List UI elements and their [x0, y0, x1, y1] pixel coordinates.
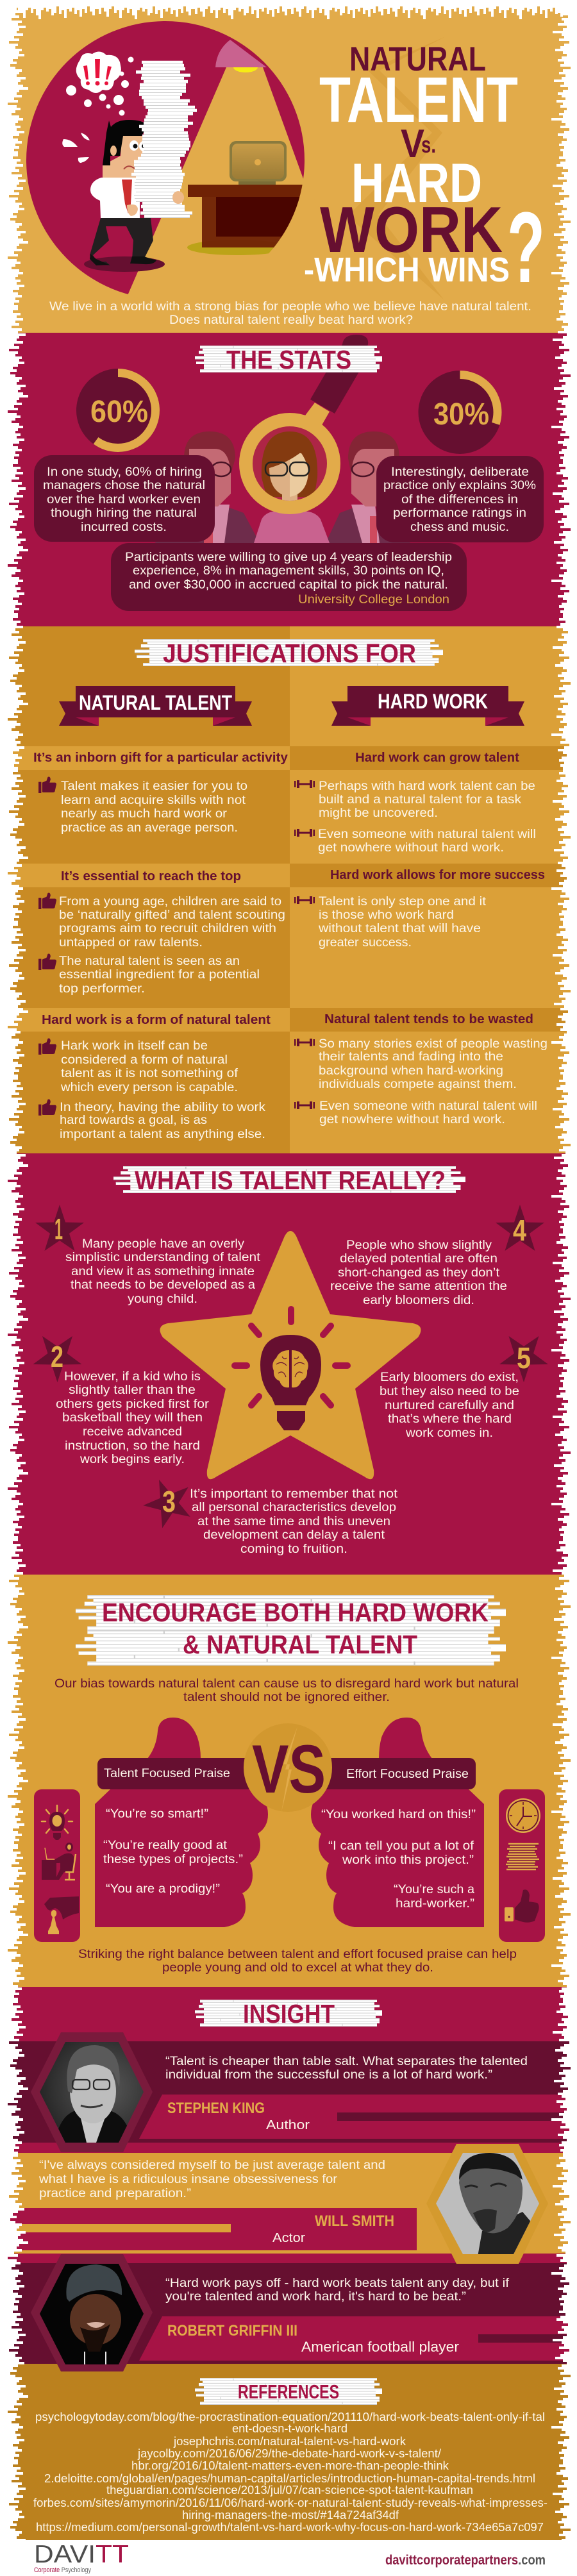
candidate centre — [254, 511, 330, 543]
quote: robert griffin iii: ROBERT GRIFFIN III — [167, 2322, 297, 2339]
bulb — [260, 1335, 321, 1430]
row 1 natural talent: Talent makes it easier for you to — [61, 779, 247, 793]
point 3: It’s important to remember that not — [190, 1487, 398, 1501]
thumb: talent focused praise: “You’re so smart!” — [106, 1807, 208, 1821]
icon panel: effort — [499, 1789, 545, 1942]
point 5: nurtured carefully and — [385, 1398, 514, 1412]
heading — [76, 1595, 506, 1666]
quote: robert griffin iii — [31, 2254, 510, 2371]
row 2 natural talent: It’s essential to reach the top — [61, 869, 241, 883]
point 2: However, if a kid who is — [64, 1369, 201, 1384]
point 4: receive the same attention the — [330, 1279, 507, 1293]
title: TALENT — [319, 64, 518, 136]
panel: header illustration — [26, 21, 305, 294]
callout: 30 percent — [376, 456, 544, 542]
panel: the stats — [34, 335, 544, 611]
title: -WHICH WINS — [304, 251, 510, 289]
point 4: People who show slightly — [346, 1238, 492, 1252]
row 2 natural talent: From a young age, children are said to — [59, 894, 281, 908]
row 2 natural talent: untapped or raw talents. — [59, 935, 203, 949]
thumb: talent focused praise — [95, 1718, 268, 1927]
point 5: work comes in. — [405, 1426, 493, 1440]
closing text: people young and old to excel at what they do. — [162, 1961, 433, 1975]
point 2: 2 — [51, 1340, 63, 1373]
intro text: Does natural talent really beat hard work? — [169, 313, 413, 327]
quote: will smith: practice and preparation.” — [39, 2186, 191, 2200]
thumb: effort focused praise: “You worked hard on this!” — [321, 1807, 476, 1821]
callout: 60 percent: over the hard worker even — [47, 492, 201, 506]
row 2 hard work: is those who work hard — [319, 908, 454, 922]
point 5 — [380, 1336, 548, 1440]
row 3 hard work: get nowhere without hard work. — [319, 1112, 505, 1126]
row 3 hard work: individuals compete against them. — [319, 1077, 517, 1091]
footer: website: davittcorporatepartners.com — [385, 2553, 546, 2568]
central star with light bulb — [160, 1231, 421, 1479]
row 2 hard work: Talent is only step one and it — [319, 894, 487, 908]
quote: will smith: Actor — [272, 2231, 305, 2245]
point 1: simplistic understanding of talent — [65, 1250, 261, 1264]
thumb: effort focused praise: Effort Focused Praise — [346, 1767, 469, 1781]
background lightning bolt — [347, 37, 446, 299]
closing text: Striking the right balance between talent and effort focused praise can help — [78, 1947, 517, 1961]
quote: robert griffin iii: American football player — [301, 2339, 459, 2355]
callout: participants: experience, 8% in management skills, 30 points on IQ, — [133, 564, 444, 578]
quote: robert griffin iii: “Hard work pays off - hard work beats talent any day, but if — [165, 2276, 510, 2290]
callout: 60 percent: though hiring the natural — [51, 506, 197, 520]
callout: 30 percent: chess and music. — [410, 520, 509, 534]
vs badge: VS — [252, 1730, 326, 1807]
heading: & NATURAL TALENT — [183, 1630, 417, 1659]
ribbon: natural talent: NATURAL TALENT — [79, 691, 232, 714]
icon: person at desk — [42, 1843, 76, 1880]
heading: REFERENCES — [238, 2380, 339, 2403]
callout: 30 percent: practice only explains 30% — [383, 478, 536, 492]
quote: stephen king: individual from the successful one is a lot of hard work.” — [165, 2068, 492, 2082]
point 2 — [33, 1336, 210, 1466]
icon: stack of papers — [506, 1844, 539, 1869]
quote: stephen king: Author — [266, 2118, 310, 2132]
heading: THE STATS — [226, 345, 351, 374]
thumb: talent focused praise: “You are a prodigy!” — [106, 1882, 220, 1896]
row 3 natural talent — [38, 1013, 271, 1141]
portrait placeholder: stephen king — [38, 2042, 147, 2145]
callout: participants — [111, 543, 467, 611]
quote: stephen king: “Talent is cheaper than table salt. What separates the talented — [165, 2054, 528, 2068]
row 3 natural talent: which every person is capable. — [60, 1080, 238, 1094]
icon: hand and chess piece — [44, 1896, 79, 1934]
portrait placeholder: will smith — [433, 2151, 542, 2257]
row 3 natural talent: considered a form of natural — [61, 1053, 228, 1067]
point 1: that needs to be developed as a — [71, 1278, 255, 1292]
point 3 — [137, 1471, 398, 1556]
stat dial: 30% — [418, 371, 501, 454]
title: NATURAL — [349, 40, 486, 78]
intro text — [54, 1677, 519, 1704]
callout: 60 percent: incurred costs. — [81, 520, 167, 534]
point 2: receive advanced — [83, 1425, 182, 1439]
stat dial: 60%: 60% — [90, 395, 148, 429]
panel: insight — [31, 1999, 548, 2371]
row 2 natural talent: top performer. — [59, 982, 145, 996]
point 4: early bloomers did. — [363, 1293, 474, 1307]
quote: stephen king: STEPHEN KING — [167, 2100, 265, 2117]
reference list: theguardian.com/science/2013/jul/07/can-science-spot-talent-kaufman — [106, 2483, 473, 2497]
reference list: 2.deloitte.com/global/en/pages/human-capital/articles/introduction-human-capital-trends.html — [44, 2471, 535, 2485]
row 1 natural talent: learn and acquire skills with not — [61, 793, 246, 807]
stressed office worker — [84, 120, 165, 272]
thought bubble — [62, 51, 133, 163]
callout: 30 percent: of the differences in — [401, 492, 518, 506]
icon: clock — [506, 1798, 540, 1833]
row 1 hard work: might be uncovered. — [319, 806, 438, 820]
reference list: forbes.com/sites/amymorin/2016/11/06/hard-work-or-natural-talent-study-reveals-what-impresses- — [33, 2496, 548, 2509]
row 1 natural talent — [33, 751, 288, 835]
light rays — [235, 1309, 347, 1405]
callout: participants: Participants were willing to give up 4 years of leadership — [125, 550, 452, 564]
intro text — [49, 299, 531, 327]
row 2 natural talent — [38, 869, 285, 996]
thumb: effort focused praise: hard-worker.” — [396, 1896, 474, 1911]
row 3 natural talent: Hark work in itself can be — [61, 1039, 208, 1053]
point 4 — [330, 1205, 544, 1307]
thumb: effort focused praise — [311, 1718, 484, 1927]
row 3 hard work: Even someone with natural talent will — [319, 1099, 537, 1113]
row 2 natural talent: essential ingredient for a potential — [59, 967, 260, 982]
row 2 natural talent: The natural talent is seen as an — [59, 954, 240, 968]
reference list: josephchris.com/natural-talent-vs-hard-work — [173, 2434, 406, 2448]
row 1 natural talent: It’s an inborn gift for a particular activity — [33, 751, 288, 765]
ribbon: natural talent — [59, 686, 252, 726]
heading — [195, 1999, 382, 2028]
desk and laptop — [187, 141, 312, 255]
quote: will smith: what I have is a ridiculous insane obsessiveness for — [38, 2172, 338, 2186]
row 2 hard work: greater success. — [319, 935, 412, 949]
icon: thumbs up — [505, 1889, 539, 1923]
candidate left — [155, 431, 260, 543]
row 1 natural talent: nearly as much hard work or — [61, 807, 228, 821]
callout: 30 percent: Interestingly, deliberate — [391, 465, 529, 479]
title: HARD — [351, 153, 482, 214]
footer: logo: Corporate Psychology — [34, 2566, 91, 2574]
row 2 hard work — [294, 868, 545, 949]
reference list: https://medium.com/personal-growth/talent-vs-hard-work-why-focus-on-hard-work-734e65a7c097 — [36, 2520, 544, 2534]
row 1 hard work: Even someone with natural talent will — [318, 827, 536, 841]
row 1 natural talent: practice as an average person. — [61, 821, 238, 835]
thumb: effort focused praise: “You’re such a — [394, 1882, 474, 1896]
panel: encourage both — [34, 1595, 545, 1975]
heading: JUSTIFICATIONS FOR — [163, 639, 416, 668]
callout: 60 percent: managers chose the natural — [43, 478, 205, 492]
heading: WHAT IS TALENT REALLY? — [135, 1166, 446, 1195]
point 2: work begins early. — [79, 1452, 185, 1466]
point 3: coming to fruition. — [240, 1542, 347, 1556]
brain — [272, 1350, 308, 1387]
thumb: effort focused praise: “I can tell you put a lot of — [328, 1839, 474, 1853]
icon: light bulb — [42, 1805, 72, 1840]
handle — [310, 335, 368, 414]
collar — [305, 403, 330, 425]
candidate right — [326, 431, 410, 543]
quote: will smith — [38, 2144, 548, 2264]
row 1 hard work: Hard work can grow talent — [355, 751, 519, 765]
thumb: effort focused praise: work into this project.” — [342, 1853, 474, 1867]
title: WORK — [320, 194, 503, 266]
point 2: basketball they will then — [62, 1410, 203, 1425]
row 3 natural talent: hard towards a goal, is as — [60, 1113, 207, 1127]
point 5: Early bloomers do exist, — [380, 1370, 519, 1384]
thumb: talent focused praise: these types of projects.” — [103, 1852, 243, 1866]
closing text — [78, 1947, 517, 1975]
point 1: 1 — [54, 1212, 63, 1246]
row 1 hard work: Perhaps with hard work talent can be — [319, 779, 535, 793]
quote: robert griffin iii: you're talented and work hard, it's hard to be beat.” — [165, 2289, 466, 2304]
row 2 hard work: without talent that will have — [318, 921, 481, 935]
stat dial: 30%: 30% — [433, 397, 489, 431]
row 1 hard work — [294, 751, 536, 855]
point 5: but they also need to be — [380, 1384, 519, 1398]
point 2: others gets picked first for — [56, 1397, 210, 1411]
point 1: and view it as something innate — [71, 1264, 255, 1278]
reference list — [33, 2410, 548, 2534]
point 5: that’s where the hard — [388, 1412, 512, 1426]
callout: 30 percent: performance ratings in — [393, 506, 526, 520]
point 3: 3 — [162, 1485, 176, 1518]
point 4: 4 — [513, 1214, 526, 1247]
callout: participants: University College London — [298, 592, 449, 606]
title: ? — [507, 192, 545, 304]
heading: INSIGHT — [243, 1999, 335, 2028]
reference list: ent-doesn-t-work-hard — [232, 2421, 347, 2435]
thumb: talent focused praise: “You’re really good at — [103, 1838, 228, 1852]
title: V — [401, 122, 424, 166]
panel: references — [33, 2378, 548, 2534]
point 3: at the same time and this uneven — [197, 1514, 390, 1528]
point 1 — [35, 1205, 261, 1306]
row 2 natural talent: programs aim to recruit children with — [59, 921, 276, 935]
row 3 natural talent: important a talent as anything else. — [60, 1127, 265, 1141]
point 3: all personal characteristics develop — [192, 1500, 396, 1514]
intro text: Our bias towards natural talent can cause us to disregard hard work but natural — [54, 1677, 519, 1691]
row 3 natural talent: talent as it is not something of — [61, 1066, 238, 1080]
panel: justifications — [33, 639, 548, 1141]
quote: will smith: WILL SMITH — [315, 2212, 394, 2230]
ribbon: hard work: HARD WORK — [378, 690, 488, 713]
panel: what is talent really — [33, 1166, 548, 1556]
point 2: slightly taller than the — [69, 1383, 196, 1397]
stack of papers — [127, 62, 197, 218]
icon panel: talent — [34, 1789, 80, 1942]
row 1 hard work: built and a natural talent for a task — [319, 792, 521, 807]
callout: 60 percent — [34, 455, 215, 542]
row 3 hard work: their talents and fading into the — [319, 1050, 503, 1064]
point 1: young child. — [128, 1292, 197, 1306]
point 4: delayed potential are often — [340, 1251, 498, 1266]
intro text: We live in a world with a strong bias for people who we believe have natural talent. — [49, 299, 531, 314]
row 1 hard work: get nowhere without hard work. — [318, 841, 504, 855]
ribbon: hard work — [331, 686, 524, 726]
quote: will smith: “I've always considered myself to be just average talent and — [39, 2158, 385, 2172]
lamp — [215, 40, 267, 72]
point 3: development can delay a talent — [203, 1528, 385, 1542]
spotlight circle — [26, 21, 305, 299]
thumb: talent focused praise: Talent Focused Praise — [104, 1766, 230, 1780]
heading: ENCOURAGE BOTH HARD WORK — [102, 1598, 489, 1627]
callout: participants: and over $30,000 in accrued capital to pick the natural. — [129, 578, 448, 592]
row 3 hard work: Natural talent tends to be wasted — [324, 1012, 533, 1026]
point 5: 5 — [517, 1341, 531, 1375]
portrait placeholder: robert griffin — [38, 2263, 147, 2366]
row 3 hard work: So many stories exist of people wasting — [319, 1037, 548, 1051]
reference list: jaycolby.com/2016/06/29/the-debate-hard-work-v-s-talent/ — [137, 2446, 442, 2460]
row 3 hard work: background when hard-working — [319, 1064, 503, 1078]
stat dial: 60% — [76, 369, 160, 452]
title — [304, 37, 545, 304]
footer: logo: DAVITT — [34, 2541, 129, 2568]
point 4: short-changed as they don’t — [338, 1266, 500, 1280]
row 3 hard work — [294, 1012, 548, 1126]
lamp light cone — [127, 67, 385, 321]
point 2: instruction, so the hard — [65, 1439, 200, 1453]
row 3 natural talent: Hard work is a form of natural talent — [42, 1013, 271, 1027]
point 1: Many people have an overly — [82, 1237, 244, 1251]
quote: stephen king — [31, 2032, 528, 2152]
heading — [195, 2378, 382, 2405]
row 2 hard work: Hard work allows for more success — [330, 868, 545, 882]
reference list: hiring-managers-the-most/#14a724af34df — [182, 2508, 399, 2522]
callout: 60 percent: In one study, 60% of hiring — [47, 465, 202, 479]
reference list: hbr.org/2016/10/talent-matters-even-more-than-people-think — [131, 2459, 449, 2472]
intro text: talent should not be ignored either. — [183, 1690, 390, 1704]
row 2 natural talent: be ‘naturally gifted’ and talent scouting — [59, 908, 285, 922]
magnifying glass with candidates — [155, 335, 410, 543]
reference list: psychologytoday.com/blog/the-procrastination-equation/201110/hard-work-beats-talent-only-if-tal — [35, 2410, 545, 2423]
title: s. — [421, 131, 436, 158]
row 3 natural talent: In theory, having the ability to work — [60, 1100, 265, 1114]
